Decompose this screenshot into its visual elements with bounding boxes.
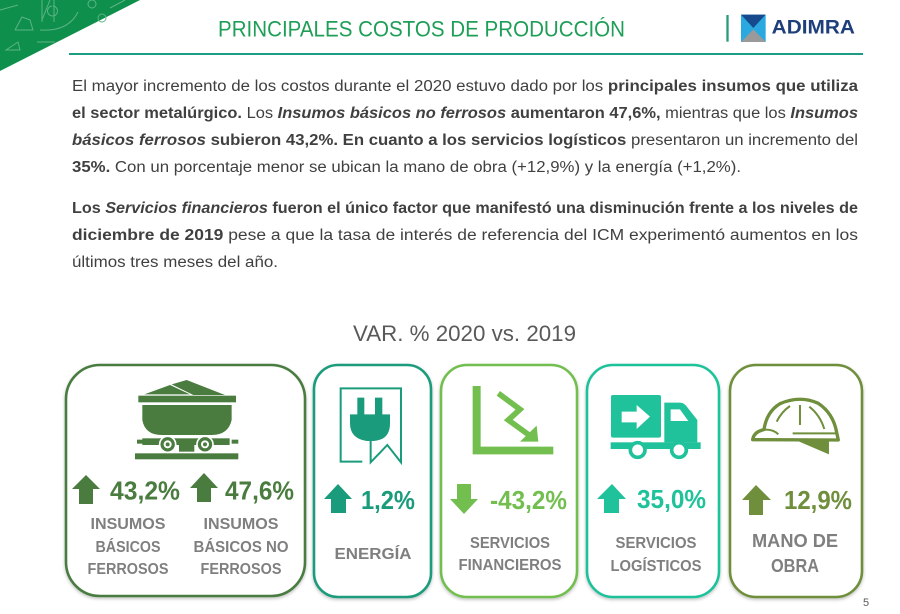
icon: falling chart (473, 386, 553, 454)
value: ferrosos: 43,2% (110, 476, 180, 506)
label: SERVICIOS (470, 535, 550, 552)
label: ferrosos: INSUMOS (90, 516, 166, 533)
label: ferrosos: FERROSOS (88, 561, 169, 578)
logo: ADIMRA: ADIMRA (772, 18, 855, 39)
panel: energía (314, 365, 431, 597)
label: FINANCIEROS (458, 557, 562, 574)
panel: mano de obra (730, 365, 862, 597)
value: no ferrosos: 47,6% (225, 476, 294, 506)
paragraph 2: Los Servicios financieros fueron el único factor que manifestó una disminución frente a los niveles de (72, 200, 858, 217)
panel: insumos básicos (66, 365, 305, 596)
paragraph 1: 35%. Con un porcentaje menor se ubican la mano de obra (+12,9%) y la energía (+1,2%). (72, 159, 741, 176)
icon: mine cart (135, 380, 238, 459)
arrow up (597, 484, 626, 513)
label: SERVICIOS (616, 535, 697, 552)
arrow up (72, 475, 100, 504)
paragraph 1: El mayor incremento de los costos durante el 2020 estuvo dado por los principales insumos que utiliza (72, 78, 858, 95)
corner decoration (0, 0, 140, 71)
value: -43,2% (490, 485, 567, 515)
chart heading: VAR. % 2020 vs. 2019 (353, 321, 576, 346)
paragraph 1: básicos ferrosos subieron 43,2%. En cuanto a los servicios logísticos presentaron un incremento del (72, 132, 858, 149)
arrow down (450, 484, 478, 514)
panel: servicios logísticos (587, 365, 719, 597)
label: MANO DE (752, 531, 838, 551)
label: ENERGÍA (334, 544, 412, 563)
label: OBRA (771, 556, 819, 576)
paragraph 1 (72, 78, 858, 176)
label: no ferrosos: BÁSICOS NO (194, 537, 288, 556)
icon: truck (611, 395, 701, 457)
paragraph 2: últimos tres meses del año. (72, 254, 278, 271)
icon: plug (341, 388, 401, 462)
label: ferrosos: BÁSICOS (96, 537, 161, 556)
panel: servicios financieros (441, 365, 577, 597)
page number: 5 (863, 597, 869, 609)
arrow up (190, 473, 218, 502)
label: no ferrosos: INSUMOS (204, 516, 279, 533)
paragraph 1: el sector metalúrgico. Los Insumos básicos no ferrosos aumentaron 47,6%, mientras que los Insumos (72, 105, 858, 122)
paragraph 2: diciembre de 2019 pese a que la tasa de interés de referencia del ICM experimentó aumentos en los (72, 227, 858, 244)
paragraph 2 (72, 200, 858, 271)
arrow up (742, 485, 771, 515)
icon: hard hat (753, 399, 838, 454)
value: 12,9% (784, 485, 852, 515)
arrow up (324, 484, 352, 513)
value: 35,0% (637, 484, 706, 514)
label: no ferrosos: FERROSOS (200, 561, 282, 578)
title: PRINCIPALES COSTOS DE PRODUCCIÓN (218, 16, 625, 42)
value: 1,2% (361, 485, 415, 515)
label: LOGÍSTICOS (610, 556, 702, 575)
logo: ADIMRA (726, 15, 855, 42)
header rule (69, 53, 863, 55)
